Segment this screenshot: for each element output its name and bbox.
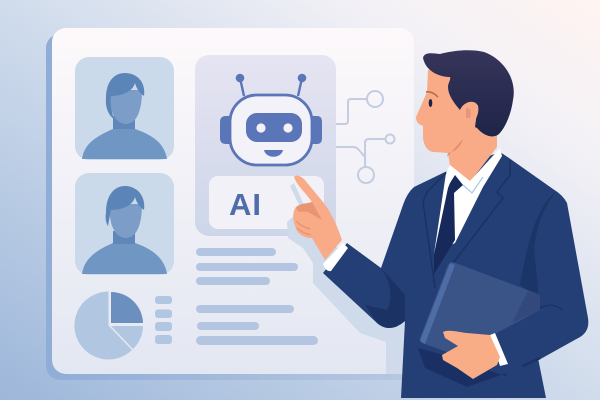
lower sleeve [493, 310, 587, 376]
profile tile 1 [75, 57, 174, 160]
arm shadow on card [287, 183, 405, 374]
text lines [196, 248, 318, 345]
pointing hand [293, 176, 342, 260]
shirt [434, 148, 502, 254]
lower cuff [490, 333, 508, 366]
necktie [434, 175, 463, 274]
tablet [418, 262, 540, 387]
head: face [416, 60, 490, 153]
hair [423, 50, 514, 136]
lapels [423, 160, 510, 288]
collar edge [463, 177, 483, 193]
upper cuff [323, 243, 348, 271]
panel: dashboard card [52, 28, 420, 374]
figure: businessman [293, 50, 588, 398]
icon: robot [220, 74, 322, 165]
pie chart [74, 291, 143, 359]
AI button [209, 176, 324, 229]
pie legend [155, 296, 172, 344]
lower hand [442, 331, 500, 379]
ear [460, 102, 478, 128]
eye and brow [426, 92, 438, 107]
profile tile 2 [75, 173, 174, 275]
panel: AI assistant [195, 55, 336, 236]
neck [448, 125, 497, 182]
card shadow [46, 34, 414, 380]
suit jacket [323, 152, 588, 398]
jacket shading [520, 192, 556, 308]
AI button: AI [229, 187, 262, 222]
circuit connectors [336, 91, 394, 183]
